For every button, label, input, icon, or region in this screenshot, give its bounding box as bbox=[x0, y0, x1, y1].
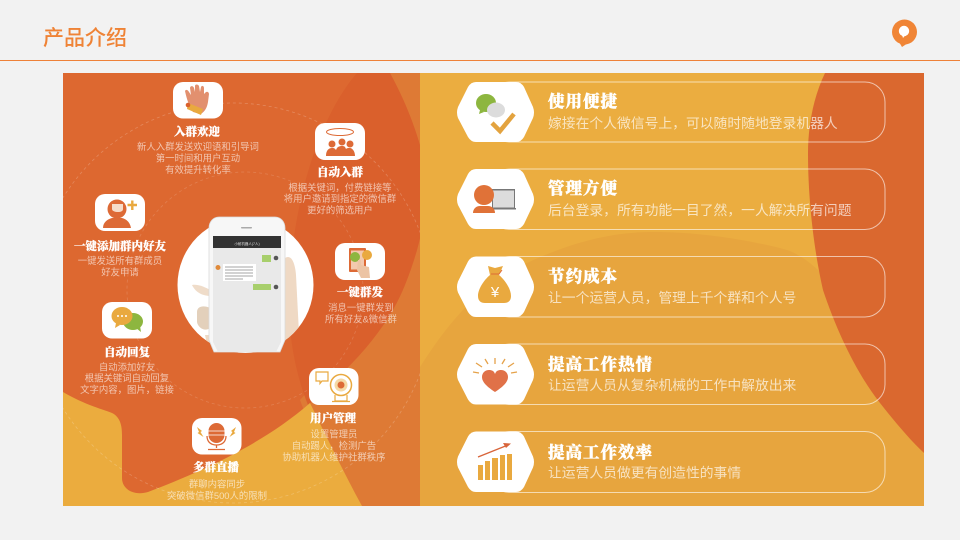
yellow wave bbox=[63, 392, 362, 506]
description: 群聊内容同步 bbox=[189, 478, 245, 490]
header rule bbox=[0, 60, 960, 61]
logo: orange speech pin bbox=[892, 20, 917, 47]
description: 文字内容，图片，链接 bbox=[80, 384, 174, 395]
chat green bubble one bbox=[262, 255, 271, 262]
dashed orbit small bbox=[127, 172, 363, 408]
phone illustration bbox=[178, 217, 314, 358]
icon: rising bars bbox=[478, 443, 512, 480]
chat avatar orange bbox=[216, 265, 220, 270]
top bar bbox=[213, 236, 281, 248]
item: 用户管理 bbox=[282, 368, 386, 462]
description: 突破微信群500人的限制 bbox=[167, 490, 267, 501]
row: 使用便捷 bbox=[457, 82, 885, 142]
icon: money bag bbox=[478, 266, 511, 303]
screen bbox=[213, 248, 281, 352]
title: 产品介绍 bbox=[43, 27, 127, 50]
description: 将用户邀请到指定的微信群 bbox=[284, 193, 397, 204]
description: 让运营人员做更有创造性的事情 bbox=[548, 466, 741, 480]
heading: 使用便捷 bbox=[548, 91, 618, 111]
chat white message bbox=[223, 264, 256, 281]
white circle bbox=[178, 217, 314, 353]
heading: 提高工作热情 bbox=[548, 354, 653, 374]
icon: tablet and hand bbox=[335, 243, 385, 280]
outline pill bbox=[490, 82, 885, 142]
heading: 多群直播 bbox=[193, 460, 239, 474]
item: 一键群发 bbox=[325, 243, 398, 324]
icon: person with plus bbox=[95, 194, 145, 231]
icon: wechat check bbox=[476, 94, 514, 131]
panel background bbox=[63, 73, 357, 494]
item: 自动入群 bbox=[284, 123, 397, 216]
item: 入群欢迎 bbox=[137, 82, 259, 175]
description: 一键发送所有群成员 bbox=[78, 255, 162, 266]
row: 提高工作热情 bbox=[457, 344, 885, 404]
icon: chat bubbles bbox=[102, 302, 152, 338]
heading: 节约成本 bbox=[548, 266, 618, 286]
hand bbox=[192, 257, 299, 343]
header bbox=[0, 20, 960, 61]
icon: money bag: ¥ bbox=[490, 284, 500, 301]
description: 设置管理员 bbox=[311, 428, 357, 440]
icon: webcam bbox=[309, 368, 358, 405]
speaker bbox=[241, 227, 252, 228]
description: 根据关键词，付费链接等 bbox=[288, 182, 392, 193]
chat avatar dark two bbox=[274, 285, 278, 289]
description: 有效提升转化率 bbox=[165, 164, 231, 175]
item: 多群直播 bbox=[167, 418, 267, 501]
darker lower arc bbox=[420, 232, 924, 506]
panel: benefits bbox=[420, 73, 924, 506]
panel background bbox=[420, 73, 924, 506]
panel: features ring bbox=[63, 73, 420, 506]
hexagon bbox=[457, 256, 534, 317]
description: 新人入群发送欢迎语和引导词 bbox=[137, 141, 259, 152]
description: 根据关键词自动回复 bbox=[85, 372, 170, 384]
red side shape bbox=[808, 73, 924, 453]
light orange corner shape bbox=[300, 73, 420, 506]
item: 一键添加群内好友 bbox=[74, 194, 166, 278]
description: 后台登录，所有功能一目了然，一人解决所有问题 bbox=[548, 202, 852, 218]
description: 让一个运营人员，管理上千个群和个人号 bbox=[548, 290, 796, 306]
row: 管理方便 bbox=[457, 169, 885, 230]
description: 所有好友&微信群 bbox=[325, 314, 398, 324]
heading: 入群欢迎 bbox=[174, 124, 220, 138]
heading: 提高工作效率 bbox=[548, 442, 654, 462]
icon: microphone bbox=[192, 418, 242, 454]
dark orange lens bbox=[289, 73, 426, 405]
nav title: 小耐机器人(7人) bbox=[234, 241, 260, 246]
icon: group of people bbox=[315, 123, 365, 160]
heading: 一键群发 bbox=[337, 285, 383, 299]
hexagon bbox=[457, 169, 534, 229]
dashed orbit large bbox=[63, 102, 420, 504]
description: 更好的筛选用户 bbox=[307, 204, 373, 216]
hexagon bbox=[457, 344, 534, 404]
heading: 自动回复 bbox=[104, 345, 150, 359]
heading: 管理方便 bbox=[548, 178, 618, 198]
row: 节约成本 bbox=[457, 256, 885, 317]
description: 消息一键群发到 bbox=[328, 302, 394, 313]
description: 让运营人员从复杂机械的工作中解放出来 bbox=[548, 377, 797, 393]
chat green bubble two bbox=[253, 284, 271, 290]
phone body bbox=[209, 217, 285, 352]
description: 自动踢人，检测广告 bbox=[292, 440, 376, 451]
outline pill bbox=[490, 256, 885, 317]
item: 自动回复 bbox=[80, 302, 174, 395]
outline pill bbox=[490, 432, 885, 492]
description: 好友申请 bbox=[101, 266, 139, 278]
icon: person at laptop bbox=[473, 185, 516, 213]
heading: 用户管理 bbox=[310, 411, 356, 425]
description: 嫁接在个人微信号上，可以随时随地登录机器人 bbox=[548, 115, 838, 131]
description: 第一时间和用户互动 bbox=[156, 152, 240, 164]
outline pill bbox=[490, 344, 885, 404]
description: 自动添加好友 bbox=[99, 362, 155, 372]
chat avatar dark one bbox=[274, 256, 278, 260]
hexagon bbox=[457, 432, 534, 492]
hexagon bbox=[457, 82, 534, 142]
heading: 自动入群 bbox=[317, 165, 363, 179]
icon: heart with rays bbox=[473, 358, 517, 392]
row: 提高工作效率 bbox=[457, 432, 885, 492]
icon: gloves bbox=[173, 82, 223, 118]
outline pill bbox=[490, 169, 885, 230]
description: 协助机器人维护社群秩序 bbox=[282, 452, 386, 462]
heading: 一键添加群内好友 bbox=[74, 239, 166, 253]
